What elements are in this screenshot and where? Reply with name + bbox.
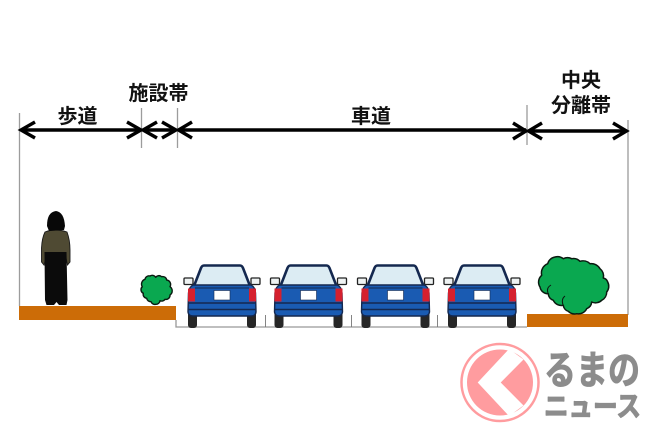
car 3	[358, 266, 434, 328]
label: central median: 中央	[561, 69, 601, 92]
guide lines	[20, 105, 628, 315]
sidewalk slab	[19, 306, 176, 320]
label: facility strip: 施設帯	[128, 82, 188, 105]
median slab	[527, 314, 628, 327]
big bush	[539, 257, 609, 314]
arrow: median width	[528, 123, 626, 139]
label: central median: 分離帯	[551, 94, 611, 117]
arrow: sidewalk width	[21, 122, 141, 138]
road surface line	[176, 320, 527, 327]
person	[42, 211, 70, 305]
label: roadway: 車道	[351, 105, 391, 128]
car 2	[270, 266, 346, 328]
small bush	[141, 275, 172, 304]
car 4	[444, 266, 520, 328]
logo mark	[462, 344, 538, 421]
car 1	[184, 266, 260, 328]
label: sidewalk: 歩道	[58, 105, 98, 128]
label: central median	[551, 69, 611, 117]
arrow: roadway width	[178, 122, 526, 139]
logo text	[544, 350, 641, 422]
arrow: facility strip width	[143, 122, 176, 138]
lane ticks	[266, 315, 438, 327]
